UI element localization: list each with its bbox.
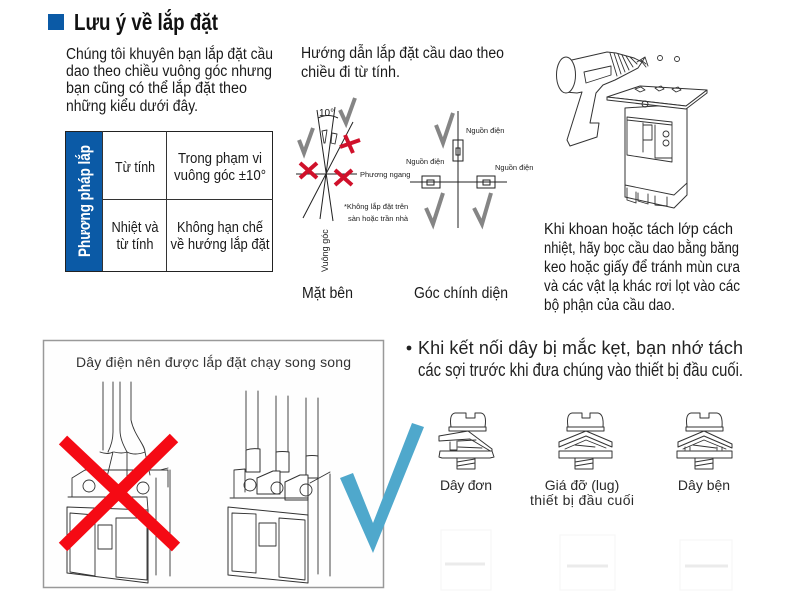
- table: installation methods: Từ tính: [115, 159, 155, 176]
- text block: installation recommendation: Chúng tôi khuyên bạn lắp đặt cầu: [66, 46, 273, 63]
- label: Dây bện: [678, 477, 730, 493]
- table: installation methods: từ tính: [116, 236, 154, 253]
- diagram: front view: [406, 111, 533, 228]
- text block: drilling advice: keo hoặc giấy để tránh mùn cưa: [544, 259, 740, 276]
- table: installation methods: Trong phạm vi: [178, 150, 262, 167]
- table: installation methods: Không hạn chế: [177, 219, 264, 236]
- heading: Lưu ý về lắp đặt: Lưu ý về lắp đặt: [74, 8, 218, 35]
- table: installation methods: Nhiệt và: [112, 219, 159, 236]
- text block: installation recommendation: bạn cũng có thể lắp đặt theo: [66, 80, 247, 97]
- caption: Góc chính diện: Góc chính diện: [414, 285, 508, 302]
- text block: installation recommendation: [66, 46, 273, 115]
- heading: Lưu ý về lắp đặt: [48, 8, 218, 35]
- label: Dây đơn: [440, 477, 492, 493]
- icon: single wire screw: [439, 413, 494, 493]
- text block: drilling advice: Khi khoan hoặc tách lớp cách: [544, 221, 733, 238]
- check marks: [299, 98, 355, 153]
- text block: drilling advice: bộ phận của cầu dao.: [544, 297, 675, 314]
- table: installation methods: [66, 131, 273, 272]
- text block: drilling advice: [544, 221, 740, 314]
- illustration: drill above breaker: [556, 52, 707, 208]
- cross marks: [300, 135, 360, 185]
- panel title: Dây điện nên được lắp đặt chạy song song: [76, 354, 351, 370]
- breaker panel: [625, 104, 687, 208]
- breaker: correct wiring: [228, 391, 330, 583]
- breaker: incorrect wiring: [67, 382, 170, 583]
- diagram: side view angles: *Không lắp đặt trên: [344, 202, 408, 211]
- table: installation methods: vuông góc ±10°: [174, 167, 266, 184]
- text block: installation recommendation: dao theo chiều vuông góc nhưng: [66, 63, 272, 80]
- faded background diagrams: [441, 530, 732, 590]
- diagram: front view: Nguồn điện: [406, 157, 444, 166]
- text block: drilling advice: nhiệt, hãy bọc cầu dao bằng băng: [544, 240, 739, 257]
- diagram: side view angles: 10°: [319, 108, 334, 119]
- text block: polarity guidance: Hướng dẫn lắp đặt cầu dao theo: [301, 45, 504, 62]
- cross: red X: [63, 438, 176, 547]
- check mark: correct wiring: [340, 423, 424, 553]
- icon: lug terminal screw: thiết bị đầu cuối: [530, 492, 634, 508]
- diagram: front view: Nguồn điện: [495, 163, 533, 172]
- diagram: front view: Nguồn điện: [466, 126, 504, 135]
- panel: parallel wiring: [44, 340, 384, 588]
- text block: stuck wire note: [407, 337, 743, 380]
- icon: stranded wire screw: [677, 413, 732, 493]
- diagram: side view angles: Vuông góc: [320, 229, 330, 272]
- diagram: side view angles: Phương ngang: [360, 170, 410, 179]
- caption: Mặt bên: Mặt bên: [302, 285, 353, 302]
- text block: installation recommendation: những kiểu dưới đây.: [66, 98, 198, 115]
- text block: stuck wire note: Khi kết nối dây bị mắc kẹt, bạn nhớ tách: [418, 337, 743, 358]
- diagram: side view angles: sàn hoặc trần nhà: [348, 214, 409, 223]
- table header: Phương pháp lắp: Phương pháp lắp: [75, 145, 94, 257]
- label: Giá đỡ (lug): [545, 477, 619, 493]
- icon: lug terminal screw: [530, 413, 634, 508]
- text block: polarity guidance: [301, 45, 504, 81]
- table: installation methods: về hướng lắp đặt: [170, 236, 270, 253]
- text block: drilling advice: và các vật lạ khác rơi lọt vào các: [544, 278, 740, 295]
- diagram: side view angles: [296, 98, 410, 272]
- text block: polarity guidance: chiều đi từ tính.: [301, 64, 400, 81]
